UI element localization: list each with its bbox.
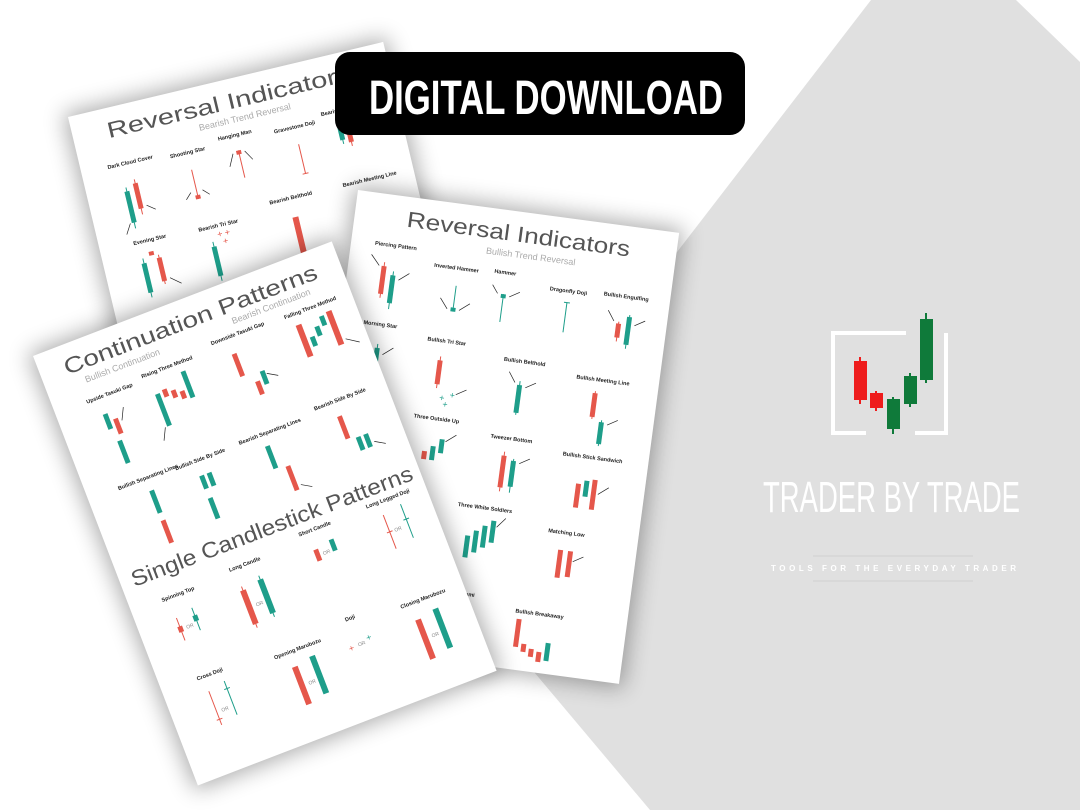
candles: + — [449, 390, 456, 401]
single candlestick candles: OR — [431, 631, 441, 639]
pattern labels: Bullish Engulfing — [603, 291, 649, 303]
pattern labels: Tweezer Bottom — [490, 434, 533, 445]
candles — [321, 254, 649, 670]
pattern labels: Bearish Tri Star — [198, 218, 240, 234]
pattern labels: Bearish Meeting Line — [342, 170, 397, 189]
pattern labels: Bearish Belthold — [269, 191, 313, 207]
candles: + — [442, 399, 448, 410]
single candlestick labels: Long Candle — [228, 556, 262, 574]
single candlestick labels: Opening Marubozu — [273, 638, 322, 661]
single candlestick labels: Closing Marubozu — [400, 588, 446, 611]
pattern labels: Hammer — [494, 269, 517, 278]
single candlestick labels: Spinning Top — [161, 586, 196, 604]
continuation labels: Bearish Separating Lines — [238, 417, 302, 447]
continuation labels: Downside Tasuki Gap — [210, 321, 266, 347]
pattern labels — [107, 98, 400, 251]
pattern labels: Bullish Stick Sandwich — [562, 451, 623, 465]
candles: + — [439, 393, 445, 403]
single candlestick candles: OR — [221, 705, 230, 714]
pattern labels: Bullish Meeting Line — [576, 375, 630, 388]
single candlestick labels: Long Legged Doji — [365, 488, 411, 510]
sheet: bullish reversal indicators (right) — [298, 190, 679, 684]
single candlestick candles — [165, 503, 459, 740]
single candlestick labels — [156, 488, 450, 692]
continuation candles — [97, 305, 403, 549]
pattern labels: Morning Star — [363, 320, 398, 330]
pattern labels: Dark Cloud Cover — [107, 154, 154, 171]
logo: trader by trade — [763, 313, 1020, 582]
pattern labels: Bullish Belthold — [503, 357, 546, 368]
candles: + + — [216, 227, 231, 239]
pattern labels: Bullish Tri Star — [427, 337, 467, 348]
pattern labels: Hanging Man — [217, 129, 253, 143]
pattern labels — [324, 240, 652, 627]
single candlestick candles: + — [365, 632, 373, 643]
pattern labels: Three White Soldiers — [457, 502, 512, 515]
single candlestick candles: OR — [255, 600, 265, 608]
pattern labels: Matching Low — [548, 528, 586, 539]
single candlestick labels: Short Candle — [298, 521, 332, 538]
title: continuation patterns: Continuation Patterns — [60, 260, 321, 380]
pattern labels: Three Inside Up — [337, 486, 380, 497]
single candlestick candles: OR — [322, 549, 332, 557]
tagline: TOOLS FOR THE EVERYDAY TRADER — [771, 564, 1016, 573]
pattern labels: Bullish Harami — [436, 588, 475, 599]
pattern labels: Dragonfly Doji — [549, 286, 588, 297]
single candlestick labels: Doji — [344, 614, 357, 623]
title: single candlestick patterns: Single Candlestick Patterns — [127, 461, 416, 592]
single candlestick candles: OR — [394, 525, 403, 534]
pattern labels: Inverted Hammer — [434, 263, 480, 275]
sheet: continuation & single candlestick patterns (front) — [33, 241, 497, 785]
subtitles: Bullish Continuation — [83, 347, 161, 385]
sheet: bearish reversal indicators (back) — [68, 42, 490, 564]
pattern labels: Bullish Breakaway — [515, 609, 565, 621]
pattern labels: Evening Star — [133, 233, 168, 247]
pattern labels: Piercing Pattern — [375, 241, 418, 252]
pattern labels: Shooting Star — [169, 146, 207, 160]
continuation labels: Bearish Side By Side — [313, 387, 367, 413]
continuation labels — [81, 294, 374, 494]
single candlestick candles: OR — [357, 640, 367, 648]
badge: digital download — [335, 52, 745, 135]
subtitle: Bearish Trend Reversal — [198, 101, 292, 133]
icon: bracket frame with candlesticks — [833, 313, 946, 434]
subtitles: Bearish Continuation — [230, 287, 312, 326]
candles — [112, 114, 378, 300]
continuation labels: Upside Tasuki Gap — [86, 382, 134, 406]
single candlestick candles: OR — [186, 622, 195, 631]
single candlestick labels: Cross Doji — [196, 667, 224, 682]
subtitle: Bullish Trend Reversal — [485, 246, 576, 267]
subtitles — [83, 287, 313, 385]
sheet title: Reversal Indicators — [405, 207, 632, 261]
pattern labels: Three Outside Up — [413, 413, 460, 425]
continuation labels: Bullish Side By Side — [174, 448, 226, 472]
pattern labels: Gravestone Doji — [273, 120, 316, 136]
continuation labels: Rising Three Method — [141, 355, 194, 380]
single candlestick candles: + — [347, 643, 356, 654]
continuation labels: Bullish Separating Lines — [117, 463, 179, 492]
candles: + — [222, 235, 229, 246]
continuation labels: Falling Three Method — [283, 296, 337, 321]
sheet title: Reversal Indicators — [104, 61, 353, 143]
pattern labels: Bearish Engulfing — [320, 102, 367, 118]
single candlestick candles: OR — [308, 678, 317, 687]
